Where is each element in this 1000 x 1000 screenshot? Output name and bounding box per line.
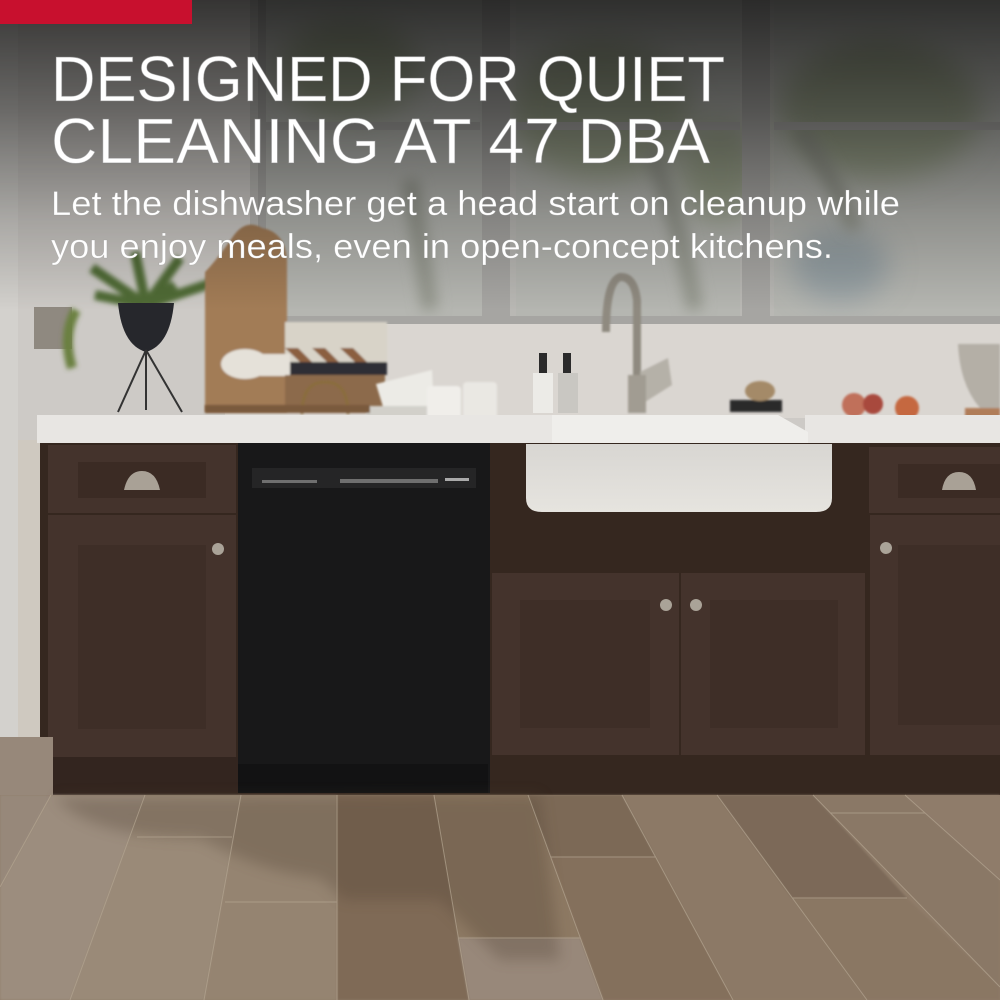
base cabinets: [40, 443, 1000, 795]
soap bottles: [533, 353, 578, 413]
wood floor: [0, 737, 1000, 1000]
title: CLEANING AT 47 DBA: [51, 105, 710, 177]
title: [51, 43, 725, 177]
center doors: [492, 573, 865, 755]
left wall trim: [0, 0, 42, 737]
left door: [48, 515, 236, 757]
right drawer: [869, 447, 1000, 513]
subtitle: [51, 185, 900, 266]
red accent bar: [0, 0, 192, 24]
subtitle: Let the dishwasher get a head start on cleanup while: [51, 185, 900, 223]
wall outlet: [34, 307, 72, 349]
tree foliage seen through windows: [280, 20, 980, 301]
subtitle: you enjoy meals, even in open-concept kitchens.: [51, 228, 833, 266]
right door: [870, 515, 1000, 755]
left toe kick: [53, 757, 238, 795]
small tray: [730, 381, 782, 412]
dark overlay behind heading: [0, 0, 1000, 310]
fruit plate: [820, 393, 965, 427]
countertop: [37, 415, 1000, 443]
floor shadow reflection: [55, 795, 560, 960]
plank joints: [0, 795, 1000, 1000]
dishwasher: [238, 443, 490, 793]
windows: [250, 0, 1000, 330]
wall background: [0, 0, 1000, 740]
mixer: [958, 344, 1000, 420]
cutting boards: [205, 225, 387, 412]
window sill and backsplash: [225, 324, 1000, 418]
faucet: [606, 277, 672, 413]
floor planks: [0, 795, 1000, 1000]
dishes: [205, 370, 497, 428]
title: DESIGNED FOR QUIET: [51, 43, 725, 115]
left drawer: [48, 445, 236, 513]
farmhouse sink: [526, 444, 832, 512]
plant: [68, 252, 215, 412]
